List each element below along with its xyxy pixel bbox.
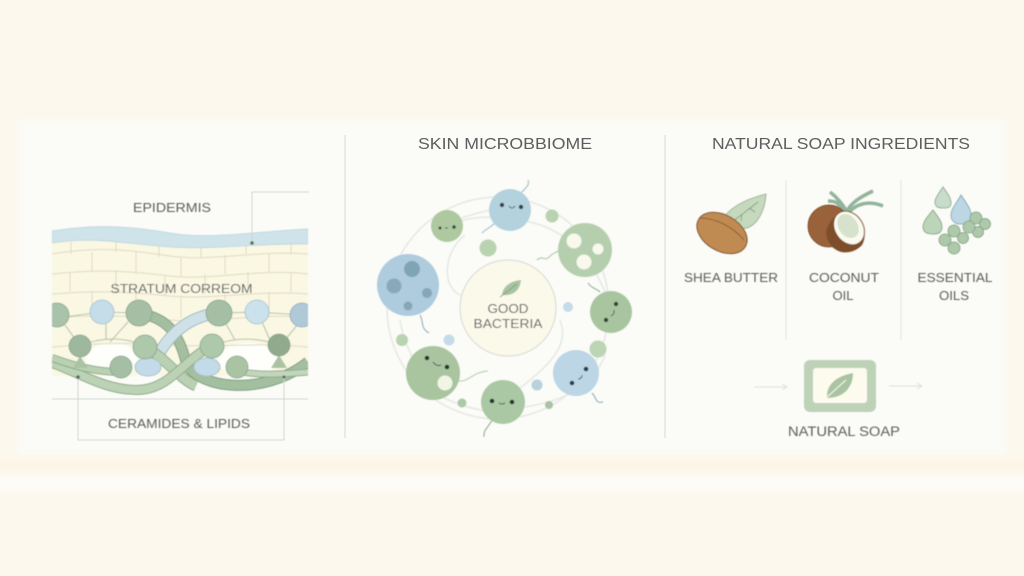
white lipid gaps bbox=[86, 343, 138, 377]
label: oil: OIL bbox=[832, 288, 854, 303]
label: bacteria: BACTERIA bbox=[474, 317, 543, 331]
label: natural soap: NATURAL SOAP bbox=[788, 424, 900, 439]
bacterium: top blue bbox=[482, 180, 531, 233]
leader lines bbox=[52, 192, 309, 440]
heading: natural soap ingredients: NATURAL SOAP INGREDIENTS bbox=[712, 136, 970, 153]
icon: coconut and palm bbox=[808, 191, 883, 252]
bacterium: left blue spotted bbox=[377, 254, 439, 333]
label: essential: ESSENTIAL bbox=[918, 270, 992, 285]
bacterium: lower left green bbox=[406, 346, 488, 400]
bacterium: right green bbox=[588, 283, 632, 333]
label: oils: OILS bbox=[939, 288, 969, 303]
label: stratum correom: STRATUM CORREOM bbox=[110, 281, 252, 296]
center circle bbox=[460, 260, 556, 356]
label: coconut: COCONUT bbox=[809, 270, 879, 285]
epidermis band bbox=[52, 227, 308, 248]
panel: microbiome ring bbox=[377, 180, 632, 437]
strand: lower left and right bbox=[52, 358, 121, 372]
label: epidermis: EPIDERMIS bbox=[133, 200, 211, 215]
connector web bbox=[64, 311, 297, 343]
bacterium: upper left green bbox=[431, 210, 463, 242]
brick lines bbox=[52, 239, 308, 347]
panel: ingredients bbox=[684, 180, 992, 439]
strand: light green ribbon A bbox=[145, 347, 196, 386]
diagram: skin cross-section bbox=[45, 227, 314, 390]
label: good: GOOD bbox=[488, 302, 528, 316]
icon: soap bar bbox=[804, 360, 876, 412]
bacterium: lower right blue bbox=[553, 350, 603, 402]
feet under cells bbox=[73, 355, 287, 368]
small blue cells bbox=[135, 358, 161, 376]
arrow: out of soap bbox=[889, 383, 922, 389]
panel: skin layers bbox=[45, 192, 314, 440]
strand: light green ribbon B bbox=[52, 346, 212, 390]
strand: blue ribbon bbox=[160, 313, 219, 352]
bacterium: upper right spotted bbox=[537, 223, 612, 277]
label: ceramides and lipids: CERAMIDES & LIPIDS bbox=[108, 416, 250, 431]
cell layer bbox=[52, 235, 308, 376]
divider: middle bbox=[664, 135, 666, 438]
icon: leaf bbox=[500, 280, 521, 297]
heading: skin microbiome: SKIN MICROBBIOME bbox=[418, 136, 592, 153]
ingredient dividers bbox=[786, 180, 901, 340]
ring lines bbox=[387, 197, 609, 419]
lipid head circles bbox=[45, 300, 314, 378]
leader dots bbox=[76, 241, 286, 379]
icon: essential oil drops and herbs bbox=[923, 187, 990, 254]
label: shea butter: SHEA BUTTER bbox=[684, 270, 778, 285]
bacterium: bottom green bbox=[481, 380, 525, 437]
strand: dark green ribbon bbox=[139, 313, 308, 385]
icon: shea nut and leaf bbox=[690, 194, 766, 262]
divider: left bbox=[344, 135, 346, 438]
arrow: into soap bbox=[754, 384, 787, 390]
floating small cells bbox=[396, 210, 606, 409]
